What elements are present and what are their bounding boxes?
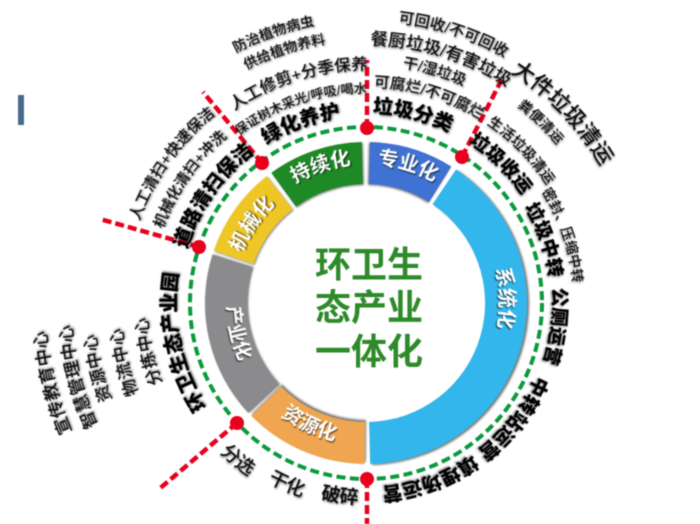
item: 密封压缩中转: 密封、压缩中转 (540, 186, 586, 284)
heading: 环卫生态产业园: 环卫生态产业园 (158, 270, 208, 415)
sector: 环卫生态产业园 (32, 270, 208, 436)
dashed green ring (190, 127, 542, 479)
heading: 中转站运营: 中转站运营 (476, 376, 549, 464)
sector: 道路清扫保洁 (118, 98, 261, 256)
heading: 道路清扫保洁: 道路清扫保洁 (171, 140, 256, 250)
item: 餐厨垃圾: 餐厨垃圾/有害垃圾 (370, 30, 512, 90)
heading: 填埋场运营: 填埋场运营 (382, 454, 480, 504)
sector: 绿化养护 (231, 14, 369, 147)
segment: 产业化 gray (205, 255, 279, 413)
segment: 专业化 blue (369, 142, 451, 202)
heading: 绿化养护: 绿化养护 (260, 101, 342, 147)
heading: 公厕运营: 公厕运营 (540, 288, 570, 368)
ring of six segments (205, 142, 527, 464)
item: 人工修剪: 人工修剪+分季保养 (232, 55, 369, 112)
segment: 机械化 yellow (214, 176, 293, 264)
sector: 垃圾收运 (468, 62, 616, 198)
item: 干化: 干化 (270, 468, 307, 500)
item: 物流中心: 物流中心 (109, 326, 140, 398)
segment: 持续化 green (271, 142, 363, 207)
centre title (315, 244, 423, 372)
heading: 垃圾中转: 垃圾中转 (524, 201, 566, 279)
item: 资源中心: 资源中心 (82, 332, 114, 404)
label: 专业化: 专业化 (379, 148, 440, 184)
heading: 垃圾收运: 垃圾收运 (468, 130, 535, 198)
item: 分选: 分选 (219, 444, 257, 480)
item: 保证树木采光: 保证树木采光/呼吸/喝水 (234, 81, 369, 137)
item: 可腐烂: 可腐烂/不可腐烂 (374, 74, 487, 122)
label: 产业化: 产业化 (224, 306, 252, 363)
label: 系统化: 系统化 (494, 267, 518, 330)
centre title: 一体化 (315, 331, 423, 372)
item: 可回收: 可回收/不可回收 (400, 10, 510, 60)
item: 智慧管理中心: 智慧管理中心 (58, 323, 100, 430)
item: 破碎: 破碎 (321, 483, 360, 508)
red dashed connector lines (100, 60, 502, 524)
sector: 资源化处理 (219, 444, 360, 508)
item: 宣传教育中心: 宣传教育中心 (32, 329, 74, 436)
label: 资源化: 资源化 (280, 402, 339, 444)
red junction dots (192, 121, 469, 486)
sector: 垃圾分类 (370, 10, 512, 136)
item: 生活垃圾清运: 生活垃圾清运 (486, 115, 557, 188)
item: 大件垃圾清运: 大件垃圾清运 (510, 62, 616, 169)
heading: 垃圾分类: 垃圾分类 (372, 96, 456, 136)
item: 干湿垃圾: 干/湿垃圾 (403, 56, 468, 89)
item: 人工清扫: 人工清扫+快速保洁 (128, 106, 218, 222)
label: 持续化: 持续化 (289, 148, 352, 186)
label: 机械化: 机械化 (227, 194, 277, 252)
item: 供给植物养料: 供给植物养料 (243, 32, 327, 72)
item: 分拣中心: 分拣中心 (134, 316, 165, 386)
centre title: 态产业 (315, 287, 423, 328)
sector: 垃圾中转 (524, 186, 586, 284)
centre title: 环卫生 (315, 244, 423, 285)
segment labels (224, 130, 518, 480)
segment: 资源化 orange (251, 386, 365, 464)
item: 粪便清运: 粪便清运 (516, 98, 566, 148)
segment: 系统化 cyan (369, 170, 527, 464)
decorative side bar (18, 95, 24, 125)
item: 防治植物病虫: 防治植物病虫 (231, 14, 316, 55)
item: 机械化清扫: 机械化清扫+冲洗 (152, 129, 230, 229)
